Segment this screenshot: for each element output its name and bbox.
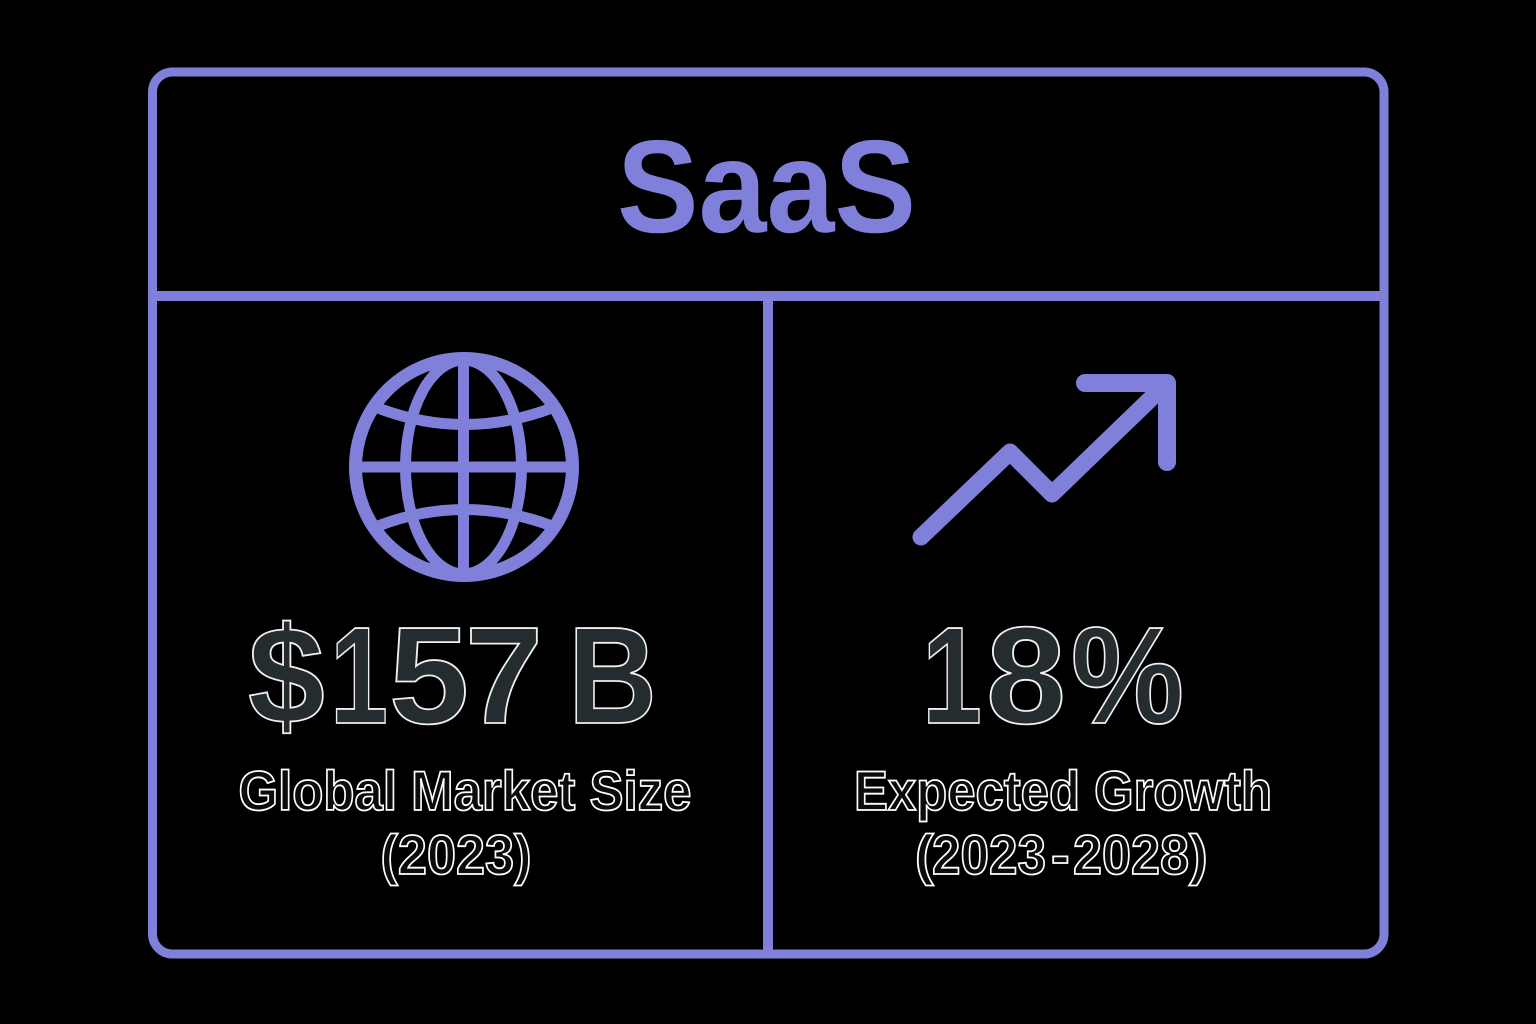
growth value: 8	[986, 599, 1066, 753]
growth value: %	[1071, 599, 1184, 753]
icon: globe	[356, 358, 572, 576]
title: SaaS	[617, 113, 916, 260]
market size value: 1	[330, 599, 388, 753]
growth years: 2028	[1073, 823, 1189, 886]
growth value: 1	[922, 599, 982, 753]
market size value: 5	[389, 599, 469, 753]
panel: market size	[238, 358, 692, 886]
icon: rising arrow	[921, 383, 1167, 537]
market size value: B	[568, 599, 657, 753]
market size year: (2023)	[380, 823, 532, 886]
market size label: Global Market Size	[238, 759, 692, 822]
market size value: 7	[465, 599, 543, 753]
panel: outer frame with dividers	[152, 72, 1384, 954]
growth years: 2023	[932, 823, 1046, 886]
growth label: Expected Growth	[854, 759, 1272, 822]
growth years: )	[1189, 823, 1208, 886]
growth years: -	[1051, 823, 1070, 886]
growth years: (	[915, 823, 934, 886]
panel: expected growth	[854, 383, 1272, 886]
market size value: $	[248, 599, 325, 753]
